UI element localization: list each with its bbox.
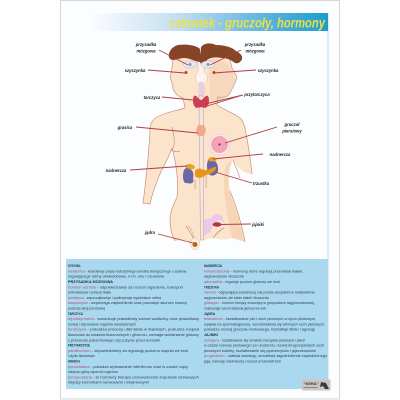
title banner: [92, 13, 328, 31]
uterus and ovary: [204, 214, 224, 236]
label: gruczoł piersiowy: gruczoł: [285, 122, 299, 127]
text column: right: w czasie rozwoju płodowego i po urodzeniu, rozwój drugorzędowych cech: [204, 344, 324, 348]
text column: left: PRZYTARCZYCE: [68, 344, 90, 348]
publisher logo: [302, 380, 330, 390]
text column: right: NADNERCZA: [204, 264, 222, 268]
text column: left: między komórkami nerwowymi i mięśniowymi: [68, 381, 149, 385]
panel: hormone descriptions: [66, 259, 328, 389]
testis: [188, 226, 200, 250]
organ labels: [106, 42, 302, 235]
text column: left: parathormon - odpowiedzialny za regulację poziomu wapnia we krwi: [68, 349, 188, 353]
text column: left: TARCZYCA: [68, 312, 83, 316]
text column: left: hormon wzrostu - odpowiedzialny za rozrost organizmu, transport: [68, 285, 183, 289]
text column: right: pobudza rozwój gruczołu krokowego, kształtuje libido i agresję: [204, 328, 315, 332]
text column: left: GRASICA: [68, 360, 80, 364]
text column: right: płciowych kobiety, kształtowanie się pęcherzyków i jajeczkowanie: [204, 349, 316, 353]
poster sheet: [60, 0, 340, 399]
text column: right: wpływa na spermatogenezę, wzrost/ułatwia się wtórnych cech płciowych,: [204, 322, 325, 326]
label: szyszynka right: szyszynka: [258, 68, 279, 73]
text column: right: TRZUSTKA: [204, 285, 219, 289]
hair: [169, 43, 242, 66]
text column: right: glukagon - hormon biorący znaczący w gospodarce węglowodanowej,: [204, 301, 315, 305]
label: jądra: jądra: [144, 230, 156, 235]
callout lines: [130, 50, 277, 243]
text column: right: testosteron - kształtowanie płci i cech płciowych w życiu płodowym,: [204, 317, 316, 321]
text column: left: tłuszczów do kwasów tłuszczowych i glicerolu, wzmaga wchłanianie glukozy: [68, 333, 199, 337]
text column: right: JAJNIKI: [204, 333, 218, 337]
label: grasica: grasica: [117, 125, 133, 130]
text column: left: zwiększa ogólną odporność organizmu: [68, 370, 118, 374]
body: torso, arms and hips: [143, 105, 252, 249]
thymus: [196, 125, 206, 136]
label: przysadka mózgowa right: przysadka: [245, 42, 265, 47]
text column: right: insulina - odgrywająca zasadniczą rolę przede wszystkim w metabolizmie: [204, 291, 315, 295]
text column: left: prolaktyna - zapoczątkowuje i podtrzymuje wydzielanie mleka: [68, 296, 162, 300]
text column: right: węglowodanów, ale także białek i tłuszczów: [204, 296, 269, 300]
text column: right: progesteron - ułatwia owulację, umożliwia zagnieżdżenie zapłodnionego: [204, 354, 327, 358]
text column: left: tyroksyna - pobudza procesy utleniania w tkankach, pobudza rozpad: [68, 328, 199, 332]
text column: left: [68, 264, 199, 385]
text column: left: trijodotyronina - warunkuje prawidłowy wzrost wzdłużny oraz prawidłowy: [68, 317, 199, 321]
text column: left: PRZYSADKA MÓZGOWA: [68, 279, 113, 284]
text column: left: melatonina - koordynuje pracę nadrzędnego ośrodka biologicznego u ssaków,: [68, 269, 187, 273]
label: gruczoł piersiowy: piersiowy: [281, 128, 302, 134]
publisher logo: "KERA": [304, 381, 319, 386]
eyes / pituitary: [183, 61, 216, 74]
text column: left: podczas akcji porodowej: [68, 306, 105, 310]
text column: left: regulującego rytmy okołodobowe, m.in. snu i czuwania: [68, 275, 165, 279]
thyroid: [193, 96, 209, 108]
text column: right: estrogeny - kształtowanie się żeńskich narządów płciowych i piersi: [204, 338, 305, 342]
text column: left: SZYSZYNKA: [68, 264, 81, 268]
text column: left: oksytocyna - wspomaga zapłodnienie oraz powoduje skurcze macicy: [68, 301, 187, 305]
text column: left: tymochalina - pobudza wytwarzanie interferonu oraz w czasie ciąży: [68, 365, 188, 369]
kidneys: [183, 159, 218, 189]
text column: left: rozwój i dojrzewanie organów wewnętrznych: [68, 322, 136, 326]
label: trzustka: trzustka: [253, 181, 270, 186]
text column: right: kortykosteroidy - hormony, które regulują przemianę białek,: [204, 269, 303, 273]
title: człowiek - gruczoły, hormony: [169, 16, 326, 30]
text column: right: węglowodanów i tłuszczów: [204, 275, 244, 279]
label: przysadka mózgowa left: przysadka: [136, 42, 156, 47]
text column: left: i płynie tkankowym: [68, 354, 95, 358]
label: nadnercza left: nadnercza: [106, 168, 127, 173]
text column: right: JĄDRA: [204, 312, 215, 316]
text column: right: zwiększając wzrost stężenia glukozy we krwi: [204, 306, 266, 310]
side shading: [224, 160, 244, 241]
label: szyszynka left: szyszynka: [125, 68, 146, 73]
text column: left: tymopoetyna - to hormony biorące przewodzenie impulsów nerwowych: [68, 375, 199, 379]
label: nadnercza right: nadnercza: [270, 152, 291, 157]
label: tarczyca: tarczyca: [144, 95, 161, 100]
mammary gland: [209, 134, 230, 155]
text column: right: adrenalina - reguluje poziom glukozy we krwi: [204, 280, 280, 284]
text column: left: aminokwasów i syntezę białek: [68, 291, 111, 295]
anatomy figure: [143, 43, 252, 250]
label: przytarczyca: przytarczyca: [243, 92, 270, 97]
adrenal glands and pancreas: [185, 157, 217, 178]
label: jajniki: jajniki: [251, 222, 265, 227]
text column: left: z przewodu pokarmowego i jej zużycie przez komórki: [68, 338, 160, 342]
label: przysadka mózgowa right: mózgowa: [245, 48, 265, 54]
label: przysadka mózgowa left: mózgowa: [136, 48, 156, 54]
poster inner right stripe: [327, 13, 329, 390]
heads in profile: [170, 54, 237, 110]
trachea and central body section: [198, 82, 204, 240]
text column: right: jaja, hamuje nadmierny rozrost endometrium: [203, 360, 281, 364]
text column: right: [203, 264, 327, 364]
